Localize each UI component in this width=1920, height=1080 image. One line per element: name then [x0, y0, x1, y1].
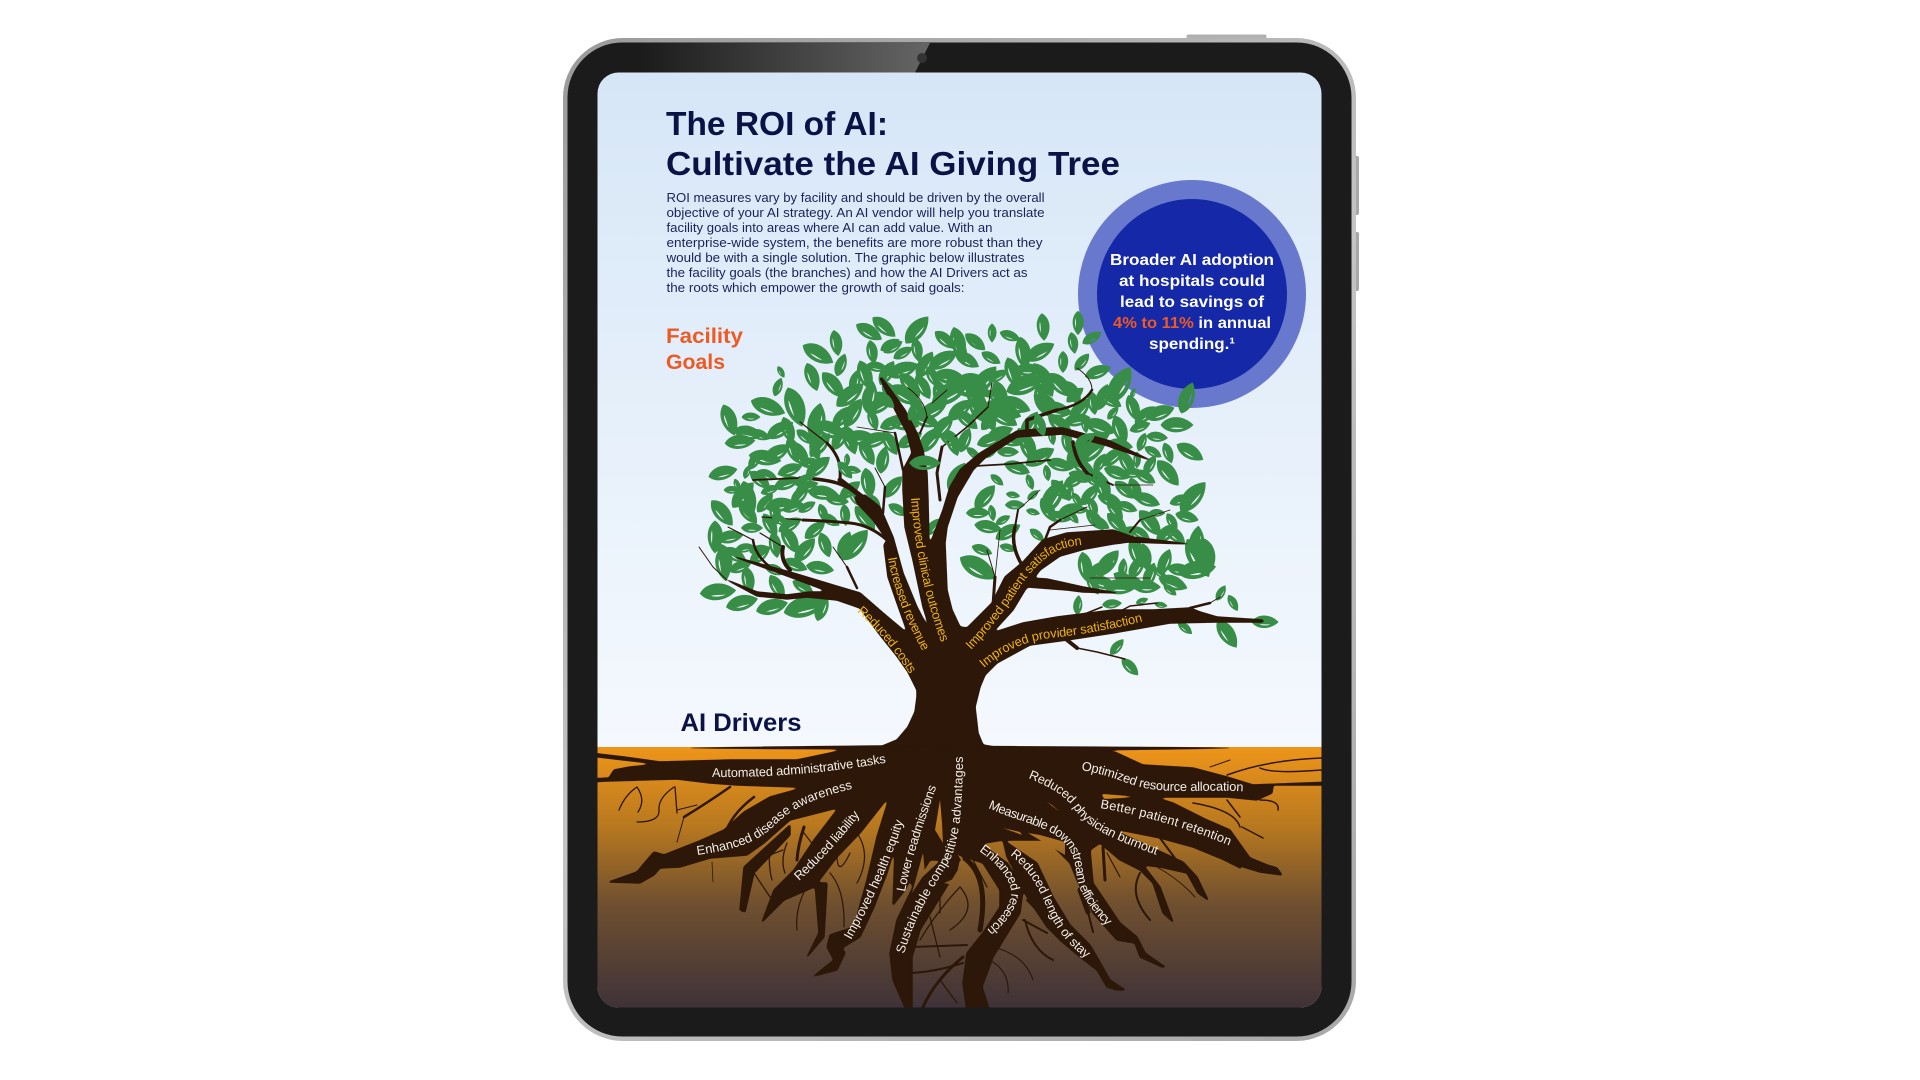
root labels: AI drivers: Reduced liability — [794, 810, 860, 880]
screen background sky — [598, 72, 1322, 1008]
root labels: AI drivers: Measurable downstream efficiency — [989, 800, 1112, 925]
intro text block: the roots which empower the growth of said goals: — [666, 281, 964, 295]
root system — [590, 746, 1330, 1012]
intro text block: ROI measures vary by facility and should be driven by the overall — [666, 191, 1044, 205]
leaves overlapping branches — [759, 384, 1111, 529]
root labels: AI drivers: Improved health equity — [844, 819, 904, 939]
root labels: AI drivers — [696, 755, 1243, 958]
title — [666, 105, 1120, 182]
root labels: AI drivers: Enhanced disease awareness — [696, 782, 852, 855]
root labels: AI drivers: Enhanced research — [980, 844, 1020, 934]
title: Cultivate the AI Giving Tree — [666, 145, 1120, 182]
callout circle: savings: spending.¹ — [1149, 336, 1235, 353]
callout circle: savings: lead to savings of — [1120, 294, 1265, 311]
heading: Facility Goals: Facility — [666, 325, 743, 348]
tree canopy leaves — [699, 311, 1279, 679]
title: The ROI of AI: — [666, 105, 888, 142]
tablet device frame — [563, 34, 1359, 1041]
root labels: AI drivers: Sustainable competitive advantages — [896, 757, 966, 953]
branch labels: facility goals: Reduced costs — [858, 606, 914, 673]
branch labels: facility goals: Improved provider satisfaction — [979, 615, 1142, 668]
root labels: AI drivers: Better patient retention — [1101, 800, 1231, 846]
branch labels: facility goals — [858, 498, 1142, 673]
intro text block: would be with a single solution. The graphic below illustrates — [665, 251, 1024, 265]
root labels: AI drivers: Optimized resource allocation — [1082, 762, 1243, 792]
root labels: AI drivers: Lower readmissions — [896, 786, 936, 891]
branch labels: facility goals: Increased revenue — [888, 558, 928, 650]
intro text block: facility goals into areas where AI can add value. With an — [666, 221, 993, 235]
callout circle: savings: Broader AI adoption — [1110, 252, 1274, 269]
intro text block: objective of your AI strategy. An AI vendor will help you translate — [666, 206, 1045, 220]
soil ground — [598, 747, 1322, 1008]
heading: Facility Goals — [666, 325, 743, 374]
callout circle: savings: at hospitals could — [1119, 273, 1265, 290]
heading: AI Drivers: AI Drivers — [680, 709, 802, 737]
tree trunk and branches — [699, 368, 1263, 748]
heading: Facility Goals: Goals — [666, 351, 725, 374]
root labels: AI drivers: Reduced length of stay — [1011, 848, 1090, 958]
callout circle: savings: 4% to 11% in annual — [1113, 315, 1271, 332]
intro text block: the facility goals (the branches) and how the AI Drivers act as — [666, 266, 1028, 280]
branch labels: facility goals: Improved clinical outcomes — [910, 498, 947, 642]
soil gaps between roots — [912, 800, 1065, 893]
intro text block — [665, 191, 1045, 295]
root labels: AI drivers: Reduced physician burnout — [1029, 770, 1158, 855]
branch labels: facility goals: Improved patient satisfaction — [965, 538, 1082, 650]
intro text block: enterprise-wide system, the benefits are more robust than they — [666, 236, 1043, 250]
root labels: AI drivers: Automated administrative tasks — [712, 755, 886, 778]
callout circle: savings — [1078, 180, 1306, 408]
